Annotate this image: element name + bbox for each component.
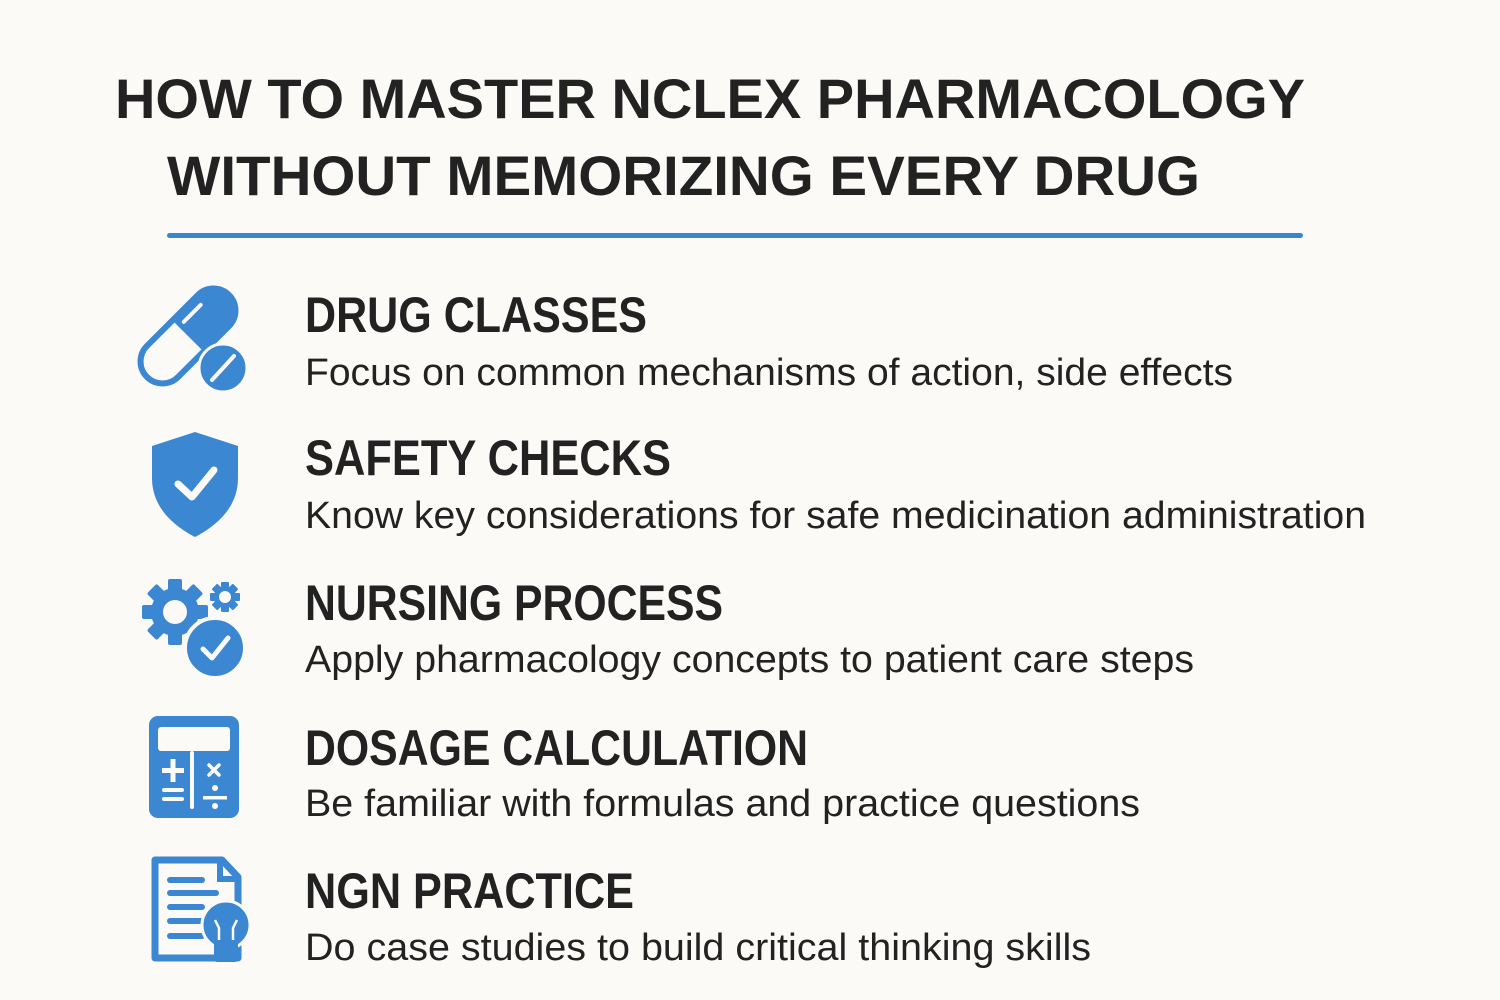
heading: safety checks: SAFETY CHECKS: [305, 430, 671, 486]
icon: shield: [152, 432, 238, 537]
heading: nursing process: NURSING PROCESS: [305, 575, 723, 631]
description: Know key considerations for safe medicination administration: [305, 495, 1366, 537]
description: Focus on common mechanisms of action, side effects: [305, 352, 1233, 394]
item: drug classes: [131, 279, 1233, 394]
description: Apply pharmacology concepts to patient care steps: [305, 639, 1194, 681]
check: [178, 470, 214, 497]
icon: document with lightbulb: [155, 860, 250, 962]
title: [115, 67, 1305, 207]
item: safety checks: [152, 430, 1366, 537]
description: Be familiar with formulas and practice questions: [305, 783, 1140, 825]
title: WITHOUT MEMORIZING EVERY DRUG: [167, 144, 1200, 207]
icon: gears with check: [142, 579, 245, 678]
title: HOW TO MASTER NCLEX PHARMACOLOGY: [115, 67, 1305, 130]
description: Do case studies to build critical thinking skills: [305, 927, 1091, 969]
heading: NGN practice: NGN PRACTICE: [305, 863, 634, 919]
item: nursing process: [142, 575, 1194, 681]
item: NGN practice: [155, 860, 1091, 969]
icon: calculator: [149, 716, 239, 818]
item: dosage calculation: [149, 716, 1140, 825]
heading: dosage calculation: DOSAGE CALCULATION: [305, 720, 808, 776]
heading: drug classes: DRUG CLASSES: [305, 287, 647, 343]
icon: pill: [131, 279, 247, 393]
